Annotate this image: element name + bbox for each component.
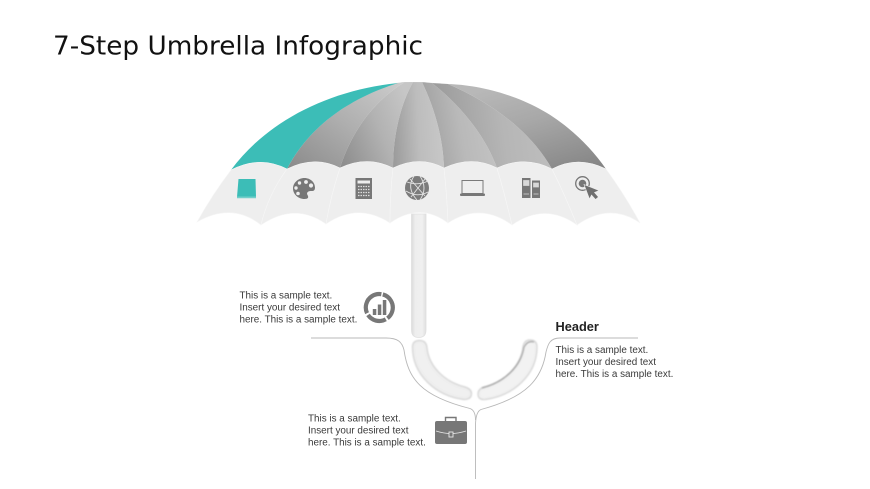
icon: donut bar chart bbox=[363, 291, 396, 324]
valance segment 5 bbox=[444, 162, 512, 225]
text block: lower left: Insert your desired text bbox=[308, 426, 409, 436]
icon: binders bbox=[522, 178, 540, 198]
canopy panel 7 bbox=[448, 84, 606, 169]
canopy panel 2 bbox=[287, 82, 405, 169]
valance segment 3 bbox=[326, 162, 393, 224]
text block: lower left bbox=[308, 414, 426, 448]
icon: palette bbox=[293, 178, 315, 199]
connector line right bbox=[476, 338, 638, 479]
icon: calculator bbox=[356, 178, 372, 199]
text block: right bbox=[556, 345, 673, 380]
text block: upper left: Insert your desired text bbox=[240, 302, 340, 314]
icon: book bbox=[237, 179, 256, 198]
text block: lower left: This is a sample text. bbox=[308, 414, 401, 424]
icon: briefcase bbox=[435, 418, 467, 444]
handle curve right bbox=[478, 340, 537, 400]
umbrella canopy bbox=[231, 82, 606, 170]
text block: upper left: This is a sample text. bbox=[240, 290, 332, 302]
header: Header bbox=[556, 319, 599, 334]
text block: right: here. This is a sample text. bbox=[556, 369, 673, 380]
handle curve left bbox=[412, 340, 472, 400]
valance segment 6 bbox=[497, 162, 577, 225]
icon: laptop bbox=[460, 180, 485, 196]
icon: globe bbox=[405, 176, 429, 200]
umbrella handle bbox=[412, 214, 537, 400]
valance segment 4 bbox=[390, 162, 448, 223]
text block: upper left: here. This is a sample text. bbox=[240, 314, 357, 326]
text block: lower left: here. This is a sample text. bbox=[308, 438, 426, 448]
canopy panel 4 bbox=[393, 82, 444, 168]
canopy top cap bbox=[395, 82, 448, 84]
valance segment 2 bbox=[261, 162, 340, 225]
handle shaft bbox=[412, 214, 426, 338]
text block: upper left bbox=[240, 290, 357, 326]
valance segment 1 bbox=[197, 162, 287, 225]
umbrella bbox=[197, 82, 640, 225]
canopy panel 3 bbox=[340, 82, 413, 168]
valance segment 7 bbox=[552, 162, 640, 225]
canopy panel 5 bbox=[422, 82, 497, 168]
icon: cursor target bbox=[576, 177, 599, 200]
umbrella valance bbox=[197, 162, 640, 225]
canopy panel 1 teal bbox=[231, 83, 398, 170]
title: 7-Step Umbrella Infographic bbox=[53, 32, 423, 62]
text block: right: This is a sample text. bbox=[556, 345, 648, 356]
canopy panel 6 bbox=[432, 83, 552, 169]
text block: right: Insert your desired text bbox=[556, 357, 656, 368]
connector line left bbox=[311, 338, 476, 420]
